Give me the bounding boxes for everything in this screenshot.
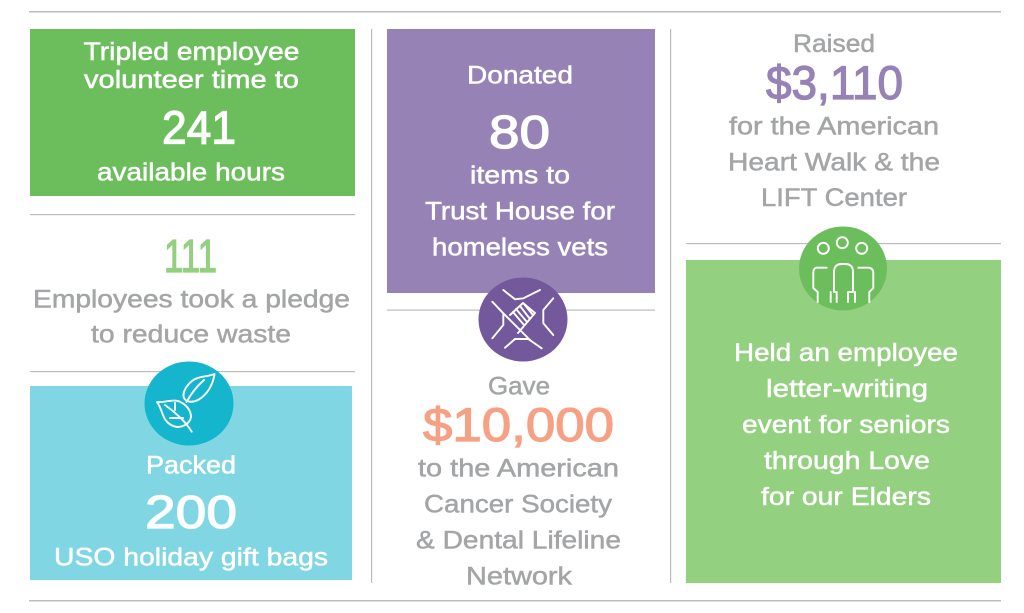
panel: letter writing: through Love <box>764 447 930 475</box>
panel: letter writing: Held an employee <box>734 339 958 367</box>
panel: heart walk: $3,110 <box>766 56 903 109</box>
panel: USO gift bags: Packed <box>146 452 236 480</box>
panel: volunteer time: 241 <box>162 102 236 154</box>
icon: leaves <box>144 362 234 446</box>
panel: heart walk: LIFT Center <box>761 184 907 212</box>
panel: letter writing: event for seniors <box>742 411 950 439</box>
panel: volunteer time <box>30 29 355 196</box>
panel: volunteer time: available hours <box>97 158 285 186</box>
panel: letter writing: for our Elders <box>761 483 931 511</box>
panel: cancer society gift: Network <box>466 562 573 590</box>
panel: waste pledge <box>33 230 350 348</box>
panel: donated items: Donated <box>467 62 573 90</box>
icon: clasped hands <box>478 278 568 362</box>
panel: cancer society gift: $10,000 <box>423 398 614 451</box>
panel: waste pledge: 111 <box>164 230 217 282</box>
panel: heart walk: Heart Walk & the <box>728 148 940 176</box>
panel: donated items: 80 <box>489 106 550 158</box>
panel: cancer society gift <box>416 372 621 590</box>
panel: donated items: Trust House for <box>425 198 615 226</box>
panel: letter writing <box>686 260 1001 583</box>
panel: cancer society gift: Gave <box>488 372 550 400</box>
panel: heart walk <box>728 30 940 212</box>
panel: donated items <box>387 29 655 293</box>
panel: cancer society gift: Cancer Society <box>424 490 613 518</box>
panel: heart walk: for the American <box>729 112 939 140</box>
panel: cancer society gift: to the American <box>418 454 619 482</box>
panel: waste pledge: to reduce waste <box>91 320 291 348</box>
panel: letter writing: letter-writing <box>766 375 928 403</box>
panel: USO gift bags: USO holiday gift bags <box>54 544 328 572</box>
panel: volunteer time: volunteer time to <box>84 66 299 94</box>
panel: cancer society gift: & Dental Lifeline <box>416 526 621 554</box>
panel: USO gift bags <box>30 386 352 580</box>
panel: donated items: items to <box>470 162 570 190</box>
panel: waste pledge: Employees took a pledge <box>33 286 350 314</box>
panel: heart walk: Raised <box>793 30 875 58</box>
icon: group of people <box>799 226 887 310</box>
panel: USO gift bags: 200 <box>145 486 237 538</box>
panel: donated items: homeless vets <box>432 234 608 262</box>
panel: volunteer time: Tripled employee <box>84 38 300 66</box>
